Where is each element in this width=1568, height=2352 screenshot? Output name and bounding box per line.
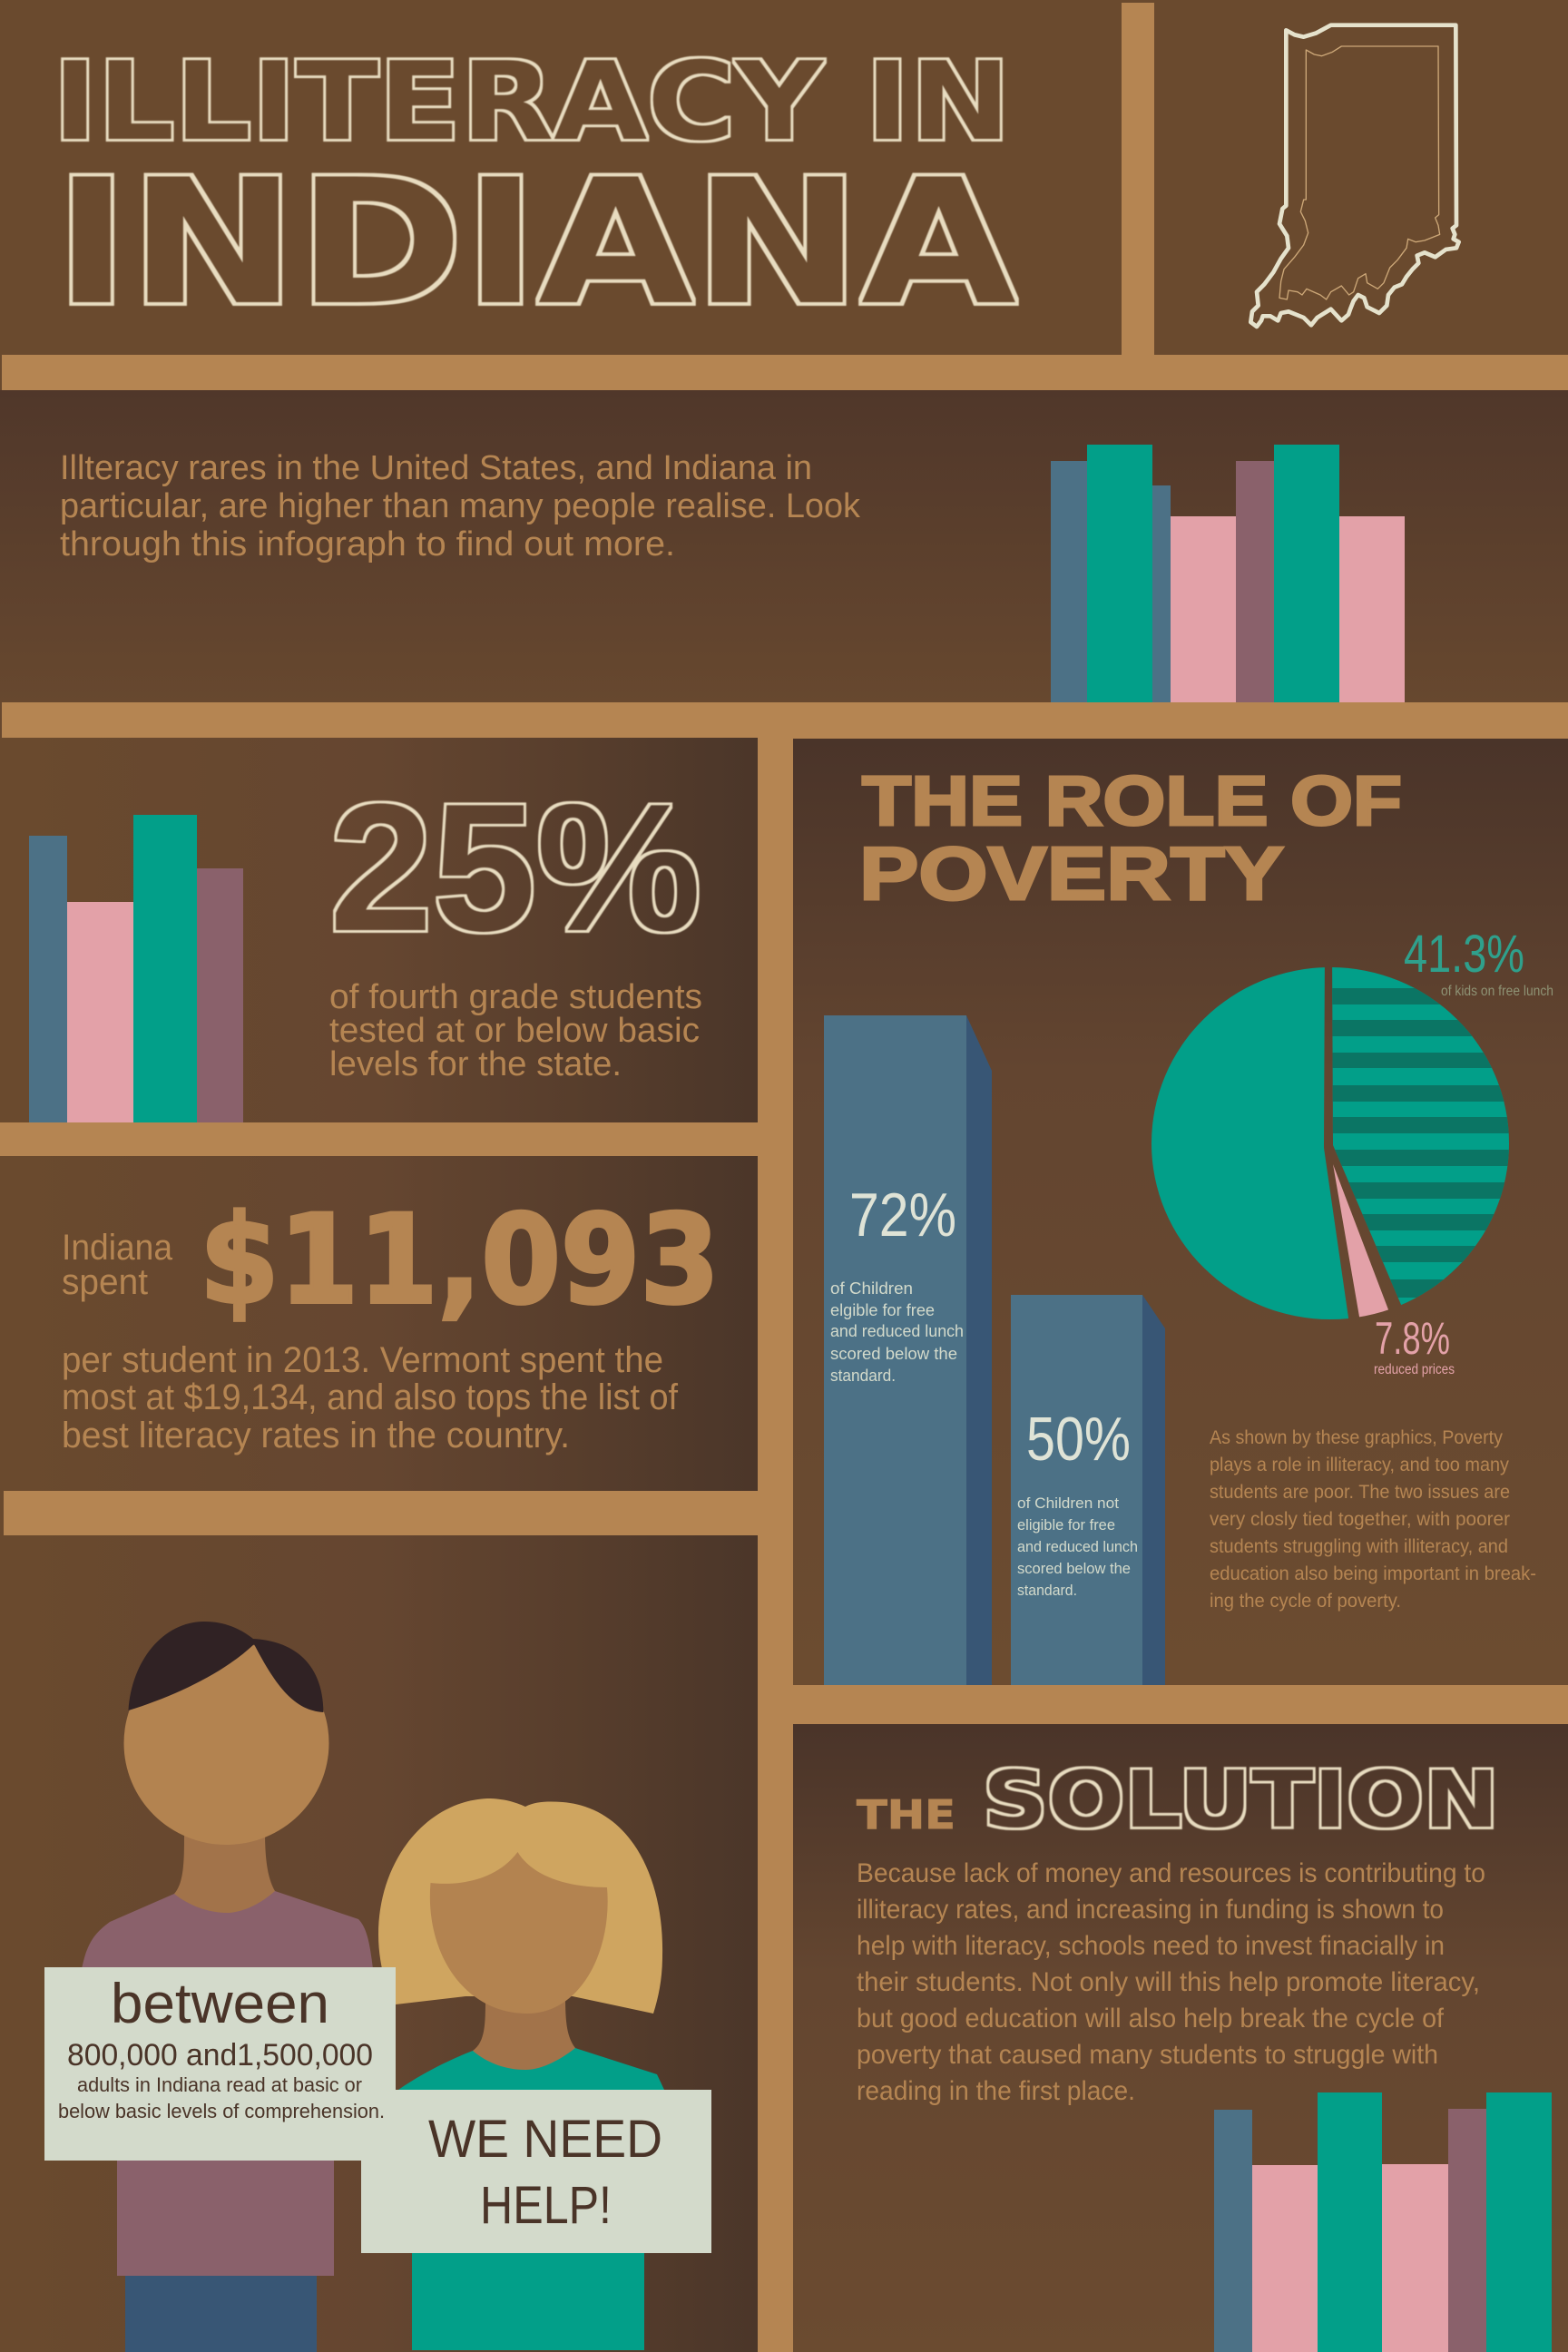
- bar: 50 percent: and reduced lunch: [1017, 1538, 1138, 1555]
- panel: role of poverty: [793, 739, 1568, 1685]
- sign: between statistic: between: [111, 1973, 329, 2035]
- spending description: per student in 2013. Vermont spent the: [62, 1340, 663, 1380]
- bar: 50 percent: of Children not: [1017, 1494, 1119, 1512]
- heading: the role of poverty: [859, 762, 1402, 916]
- icon: books on shelf: [1214, 2092, 1552, 2352]
- icon: books on shelf: [1051, 445, 1405, 702]
- poverty explanation text: students are poor. The two issues are: [1210, 1482, 1510, 1503]
- solution text: but good education will also help break the cycle of: [857, 2004, 1445, 2034]
- Indiana spent label: [62, 1228, 173, 1302]
- statistic description: [329, 978, 702, 1083]
- Indiana spent label: Indiana: [62, 1228, 173, 1268]
- sign: between statistic: 800,000 and1,500,000: [67, 2038, 373, 2073]
- solution text: help with literacy, schools need to invest finacially in: [857, 1931, 1445, 1961]
- solution text: Because lack of money and resources is contributing to: [857, 1858, 1485, 1888]
- intro text: through this infograph to find out more.: [60, 525, 675, 564]
- label: 7.8% reduced prices: 7.8%: [1375, 1313, 1450, 1364]
- spending description: [62, 1340, 679, 1455]
- poverty explanation text: education also being important in break-: [1210, 1563, 1536, 1584]
- label: 41.3% free lunch: 41.3%: [1404, 925, 1524, 984]
- panel: the solution: [793, 1724, 1568, 2352]
- bar: 72 percent: of Children: [830, 1279, 913, 1298]
- sign: we need help: WE NEED: [428, 2110, 662, 2169]
- bar: 50 percent: eligible for free: [1017, 1516, 1115, 1534]
- label: 41.3% free lunch: of kids on free lunch: [1441, 984, 1553, 999]
- bar: 50 percent: [1011, 1295, 1165, 1685]
- intro text: particular, are higher than many people realise. Look: [60, 487, 861, 525]
- panel: spending statistic: [0, 1156, 758, 1535]
- statistic: 25%: 25%: [329, 767, 701, 969]
- sign: between statistic: [44, 1967, 396, 2161]
- spending description: most at $19,134, and also tops the list of: [62, 1377, 679, 1417]
- figure: woman: [378, 1798, 664, 2350]
- heading: the role of poverty: THE ROLE OF: [862, 762, 1402, 840]
- poverty explanation text: ing the cycle of poverty.: [1210, 1591, 1401, 1612]
- statistic description: tested at or below basic: [329, 1012, 700, 1050]
- bar: 50 percent: standard.: [1017, 1582, 1077, 1599]
- solution text: illiteracy rates, and increasing in funding is shown to: [857, 1895, 1444, 1925]
- label: 7.8% reduced prices: [1374, 1313, 1455, 1377]
- icon: books on shelf: [29, 815, 243, 1122]
- solution text: poverty that caused many students to struggle with: [857, 2040, 1438, 2070]
- panel: 25 percent statistic: [0, 738, 758, 1122]
- poverty explanation text: plays a role in illiteracy, and too many: [1210, 1455, 1509, 1475]
- Indiana spent label: spent: [62, 1262, 148, 1302]
- heading: the role of poverty: POVERTY: [859, 831, 1284, 916]
- intro text: [60, 449, 861, 564]
- intro text: Illteracy rares in the United States, and Indiana in: [60, 449, 812, 487]
- bar: 72 percent: [824, 1015, 992, 1685]
- solution text: their students. Not only will this help promote literacy,: [857, 1967, 1480, 1997]
- label: 7.8% reduced prices: reduced prices: [1374, 1362, 1455, 1377]
- sign: we need help: [361, 2090, 711, 2253]
- bar: 72 percent: and reduced lunch: [830, 1321, 964, 1340]
- solution text: [857, 1858, 1485, 2106]
- poverty explanation text: As shown by these graphics, Poverty: [1210, 1427, 1503, 1448]
- panel: people with signs: [0, 1535, 758, 2352]
- poverty explanation text: students struggling with illiteracy, and: [1210, 1536, 1508, 1557]
- statistic description: of fourth grade students: [329, 978, 702, 1016]
- panel: introduction: [0, 390, 1568, 738]
- heading: the: THE: [857, 1792, 956, 1838]
- bar: 72 percent: standard.: [830, 1366, 896, 1385]
- sign: between statistic: adults in Indiana read at basic or: [77, 2073, 362, 2096]
- bar: 50 percent: scored below the: [1017, 1560, 1131, 1577]
- sign: we need help: HELP!: [480, 2176, 612, 2235]
- panel: header: [0, 0, 1568, 390]
- sign: between statistic: below basic levels of comprehension.: [58, 2100, 385, 2122]
- bar: 72 percent: elgible for free: [830, 1300, 935, 1319]
- poverty explanation text: very closly tied together, with poorer: [1210, 1509, 1510, 1530]
- bar: 72 percent: scored below the: [830, 1344, 957, 1363]
- title line 1: ILLITERACY IN: [53, 40, 1011, 165]
- heading: solution: SOLUTION: [983, 1755, 1499, 1846]
- bar: 72 percent: 72%: [849, 1181, 956, 1250]
- statistic: $11,093: $11,093: [200, 1189, 720, 1331]
- icon: Indiana state outline: [1250, 25, 1459, 327]
- poverty explanation text: [1210, 1427, 1536, 1612]
- title line 2: INDIANA: [54, 142, 1016, 343]
- bar: 50 percent: 50%: [1026, 1405, 1131, 1474]
- spending description: best literacy rates in the country.: [62, 1416, 570, 1455]
- figure: man: [82, 1622, 373, 2352]
- statistic description: levels for the state.: [329, 1045, 622, 1083]
- solution text: reading in the first place.: [857, 2076, 1135, 2106]
- pie chart: [1152, 967, 1515, 1319]
